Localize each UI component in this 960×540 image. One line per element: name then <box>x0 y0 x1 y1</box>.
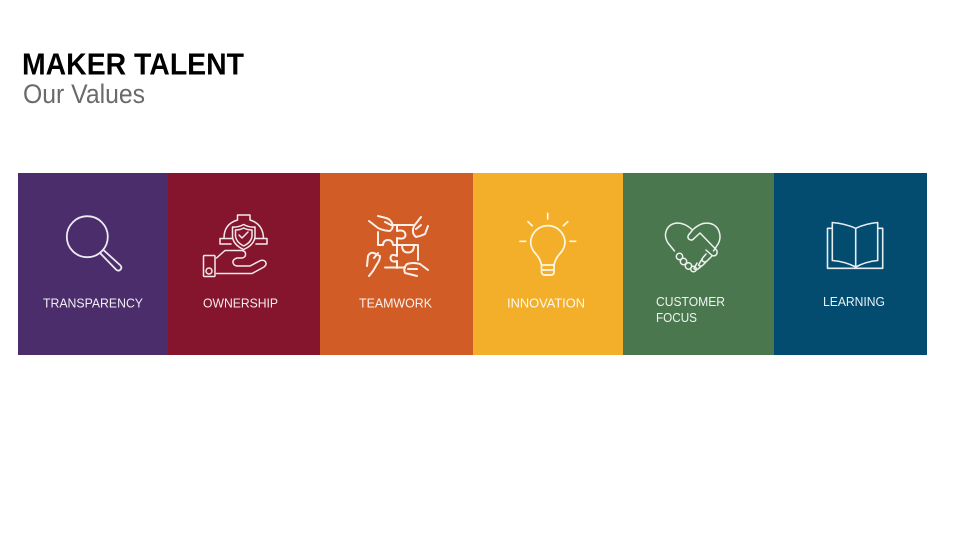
icon: light bulb <box>520 213 576 275</box>
icon: handshake heart <box>665 223 720 272</box>
label: innovation: INNOVATION <box>507 296 585 310</box>
panel: learning <box>774 173 927 355</box>
icon: magnifying glass <box>67 216 121 271</box>
panel: customer focus <box>623 173 774 355</box>
icon: open book <box>828 222 883 268</box>
panel: innovation <box>473 173 623 355</box>
panel: ownership <box>168 173 320 355</box>
subtitle: Our Values <box>23 79 145 109</box>
label: learning: LEARNING <box>823 294 885 309</box>
icon: puzzle with hands <box>367 216 428 276</box>
label: customer focus second line: FOCUS <box>656 310 697 325</box>
title: MAKER TALENT <box>22 48 244 82</box>
label: teamwork: TEAMWORK <box>359 296 432 310</box>
icon: helmet with shield over hand <box>204 215 267 276</box>
label: transparency: TRANSPARENCY <box>43 296 143 310</box>
panel: transparency <box>18 173 168 355</box>
label: ownership: OWNERSHIP <box>203 296 278 310</box>
label: customer focus: CUSTOMER <box>656 294 725 309</box>
panel: teamwork <box>320 173 473 355</box>
